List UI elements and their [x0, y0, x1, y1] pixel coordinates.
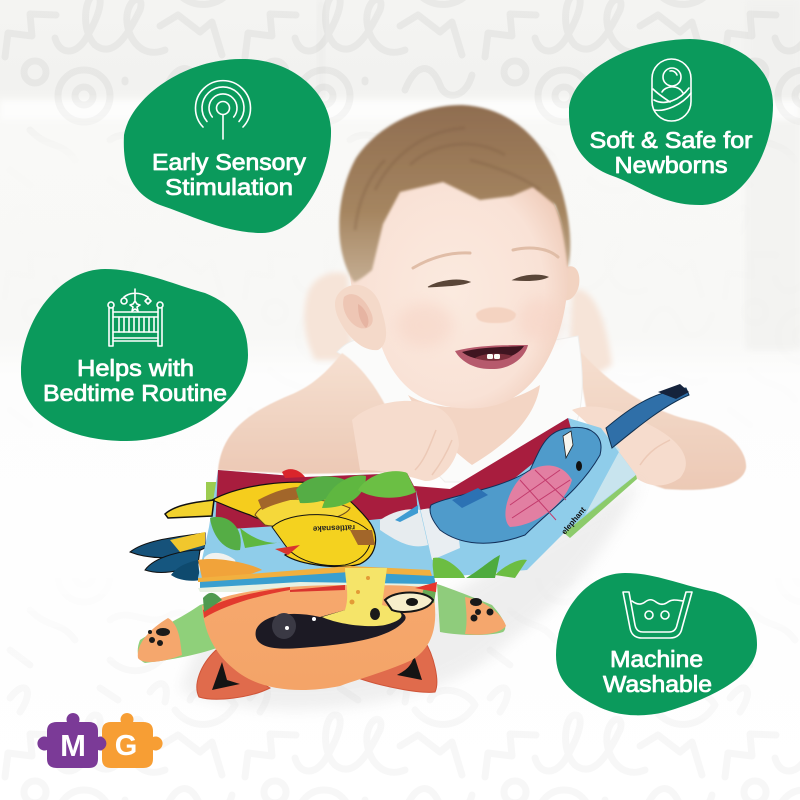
left red ear: [197, 650, 270, 699]
label text: Stimulation: [165, 174, 293, 200]
left arm and shoulder: [218, 353, 420, 474]
icon: antenna signal: [196, 81, 250, 139]
cheeks: [397, 303, 453, 347]
mouth: [455, 345, 528, 369]
right red ear: [358, 640, 437, 692]
label text: Machine: [610, 646, 703, 672]
word: elephant: elephant: [560, 505, 588, 536]
left hand: [352, 401, 459, 481]
left ear: [335, 285, 386, 350]
hair: [339, 105, 570, 282]
badge: Early Sensory Stimulation: [124, 59, 331, 233]
chest: [408, 385, 540, 465]
right arm: [575, 345, 746, 490]
badge: Helps with Bedtime Routine: [21, 269, 248, 441]
icon: wash tub: [623, 592, 692, 638]
label text: Bedtime Routine: [43, 380, 227, 406]
leaves: [296, 476, 345, 503]
right ear: [564, 266, 579, 300]
background: squiggle doodle pattern: [2, 0, 800, 110]
elephant ear: [505, 465, 572, 527]
label text: Helps with: [77, 355, 194, 381]
left leg: [138, 604, 225, 663]
puzzle piece G: G: [115, 730, 137, 762]
eyes: [428, 280, 470, 287]
label text: Soft & Safe for: [590, 127, 753, 153]
rattle tail: [165, 500, 214, 518]
red tab: [282, 469, 305, 478]
snake body: [212, 482, 376, 567]
left page: [165, 469, 436, 592]
blurred legs behind baby: [304, 272, 612, 378]
shell: [202, 585, 435, 690]
baby: [218, 105, 746, 490]
nose: [476, 307, 516, 323]
icon: crib with mobile: [108, 289, 163, 346]
bottom leaves right: [392, 555, 432, 578]
word: rattlesnake: rattlesnake: [312, 523, 355, 533]
right leg: [437, 584, 505, 635]
badge: Machine Washable: [556, 573, 757, 715]
eyebrows: [413, 253, 470, 268]
giraffe flap: [322, 568, 402, 626]
puzzle piece M: M: [60, 728, 86, 763]
elephant: [430, 427, 601, 543]
icon: swaddled baby: [652, 59, 691, 121]
right page: [392, 384, 689, 578]
badge: Soft & Safe for Newborns: [569, 39, 773, 205]
head: [350, 150, 568, 409]
right hand: [572, 406, 686, 485]
face on shell: [256, 608, 406, 649]
logo: MG puzzle pieces: [37, 713, 163, 768]
label text: Washable: [603, 671, 712, 697]
white vest: [337, 336, 582, 482]
elephant trunk tail: [606, 388, 689, 448]
turtle toy: [138, 568, 506, 699]
feather tabs behind book: [130, 482, 218, 581]
cloth book: [130, 384, 689, 709]
label text: Early Sensory: [152, 149, 307, 175]
label text: Newborns: [614, 152, 728, 178]
cloud: [204, 553, 238, 572]
book shadow: [180, 480, 640, 709]
page edge: [198, 559, 262, 578]
